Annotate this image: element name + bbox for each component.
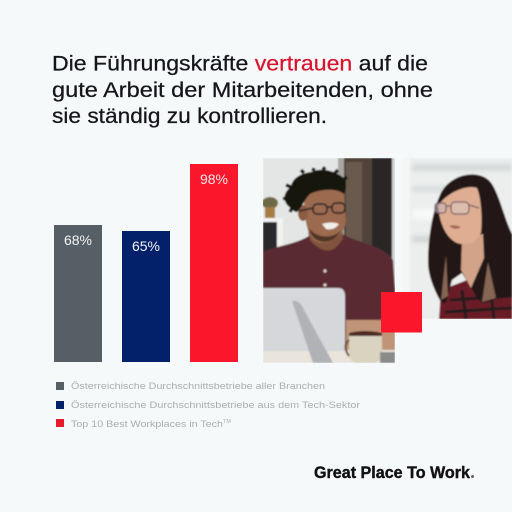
- logo: Great Place To Work: Great Place To Work: [314, 464, 471, 482]
- mug: [349, 334, 382, 363]
- title: sie ständig zu kontrollieren.: [52, 104, 327, 128]
- laptop: [263, 288, 345, 351]
- legend item: top 10: TM: [223, 419, 231, 425]
- legend: [56, 381, 360, 430]
- face: [304, 185, 346, 243]
- legend item: all industries: Österreichische Durchschnittsbetriebe aller Branchen: [71, 381, 325, 392]
- legend item: top 10: Top 10 Best Workplaces in Tech: [71, 419, 223, 430]
- title: Die Führungskräfte vertrauen auf die: [52, 52, 428, 76]
- bar: 65%: [122, 231, 170, 362]
- legend item: tech sector: Österreichische Durchschnittsbetriebe aus dem Tech-Sektor: [71, 400, 360, 411]
- shirt: [263, 234, 395, 345]
- red square accent: [381, 292, 422, 332]
- hair: [285, 170, 346, 212]
- face: [438, 187, 482, 244]
- title: gute Arbeit der Mitarbeitenden, ohne: [52, 78, 433, 102]
- photo: woman with glasses: [402, 158, 512, 319]
- table and arm: [346, 320, 395, 350]
- title: [52, 52, 433, 128]
- bar: 98%: [190, 164, 238, 362]
- photo: man with laptop: [262, 158, 395, 363]
- shirt: [439, 275, 512, 319]
- neck: [461, 234, 484, 288]
- bar chart: [54, 164, 238, 362]
- bar: 65%: 65%: [132, 238, 160, 254]
- bar: 68%: 68%: [64, 232, 92, 248]
- glasses: [435, 202, 479, 214]
- neck: [307, 231, 344, 251]
- hair: [428, 174, 512, 303]
- bar: 98%: 98%: [200, 171, 228, 187]
- glasses: [299, 203, 345, 214]
- bar: 68%: [54, 225, 102, 362]
- hair highlights: [441, 255, 496, 302]
